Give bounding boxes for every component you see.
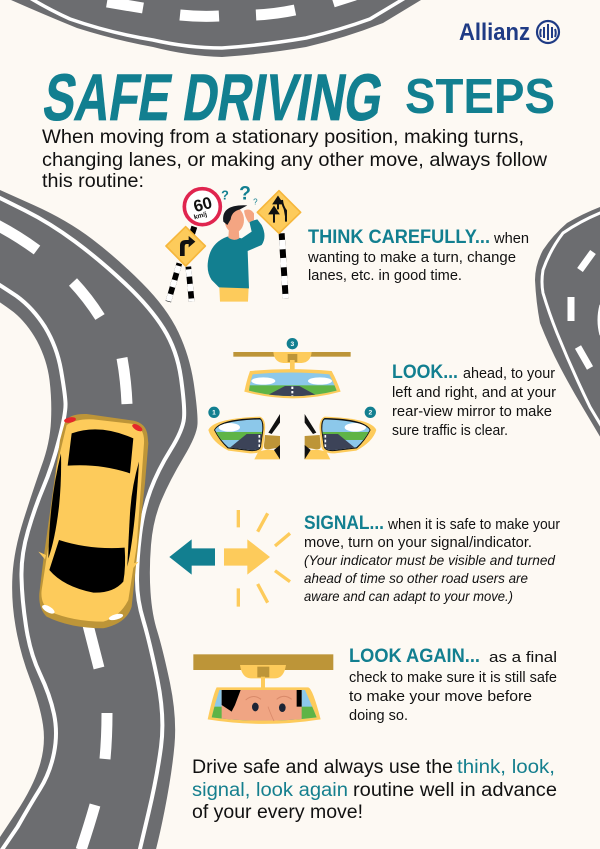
icon: thinking man with road signs: ?: [239, 183, 251, 204]
text: signal: (Your indicator must be visible and turned: [304, 552, 556, 568]
text: look: ahead, to your: [463, 365, 555, 382]
side mirror: left: [208, 414, 280, 459]
text: think carefully: THINK CAREFULLY...: [308, 227, 490, 248]
title: STEPS: [405, 70, 555, 124]
icon: signal arrows: [169, 510, 290, 607]
text: signal: when it is safe to make your: [387, 516, 560, 533]
text: signal: ahead of time so other road users are: [304, 570, 528, 586]
intro text: When moving from a stationary position, making turns,: [42, 126, 524, 148]
arrow: teal left: [169, 539, 215, 575]
text: signal: aware and can adapt to your move.): [304, 588, 513, 604]
text: signal: SIGNAL...: [304, 513, 384, 534]
side mirror: right: [305, 414, 376, 459]
car: [38, 414, 148, 628]
icon: rear-view and side mirrors: [208, 338, 376, 459]
icon: thinking man with road signs: km/j: [193, 211, 208, 221]
text: look: sure traffic is clear.: [392, 422, 508, 439]
text: think carefully: [307, 227, 529, 284]
badge: 3: [287, 338, 298, 349]
icon: thinking man with road signs: [166, 183, 301, 302]
text: look: [392, 362, 556, 439]
closing message: Drive safe and always use the: [192, 757, 453, 778]
text: look again: LOOK AGAIN...: [349, 646, 480, 667]
road: right edge: [535, 205, 600, 445]
badge: 2: [365, 407, 376, 418]
text: signal: [304, 513, 560, 604]
intro text: changing lanes, or making any other move, always follow: [42, 149, 548, 171]
icon: thinking man with road signs: ?: [221, 188, 229, 202]
logo: Allianz: Allianz: [459, 19, 530, 46]
text: look: LOOK...: [392, 362, 458, 383]
text: think carefully: lanes, etc. in good time.: [308, 267, 462, 284]
icon: thinking man with road signs: 60: [191, 193, 214, 216]
road: top: [11, 0, 421, 57]
text: look again: [349, 646, 557, 724]
badge: 1: 1: [212, 410, 216, 417]
road: left winding: [0, 185, 198, 849]
closing message: routine well in advance: [353, 780, 557, 801]
text: think carefully: when: [493, 230, 529, 247]
text: look again: doing so.: [349, 707, 408, 724]
badge: 3: 3: [290, 341, 294, 348]
closing message: of your every move!: [192, 802, 363, 823]
text: look again: to make your move before: [349, 688, 532, 705]
closing message: signal, look again: [192, 780, 348, 801]
icon: rear-view mirror with driver's eyes: [193, 654, 333, 724]
text: think carefully: wanting to make a turn, change: [307, 249, 516, 266]
badge: 1: [208, 407, 220, 418]
badge: 2: 2: [368, 410, 372, 417]
text: look: left and right, and at your: [392, 384, 556, 401]
text: signal: move, turn on your signal/indicator.: [304, 534, 532, 551]
text: look again: check to make sure it is still safe: [349, 669, 557, 686]
arrow: yellow right: [224, 539, 270, 575]
icon: thinking man with road signs: ?: [253, 198, 258, 207]
intro text: this routine:: [42, 170, 144, 192]
closing message: [192, 757, 557, 823]
closing message: think, look,: [457, 757, 555, 778]
intro text: [42, 126, 548, 192]
text: look: rear-view mirror to make: [392, 403, 552, 420]
text: look again: as a final: [489, 649, 557, 666]
title: SAFE DRIVING: [39, 61, 388, 135]
